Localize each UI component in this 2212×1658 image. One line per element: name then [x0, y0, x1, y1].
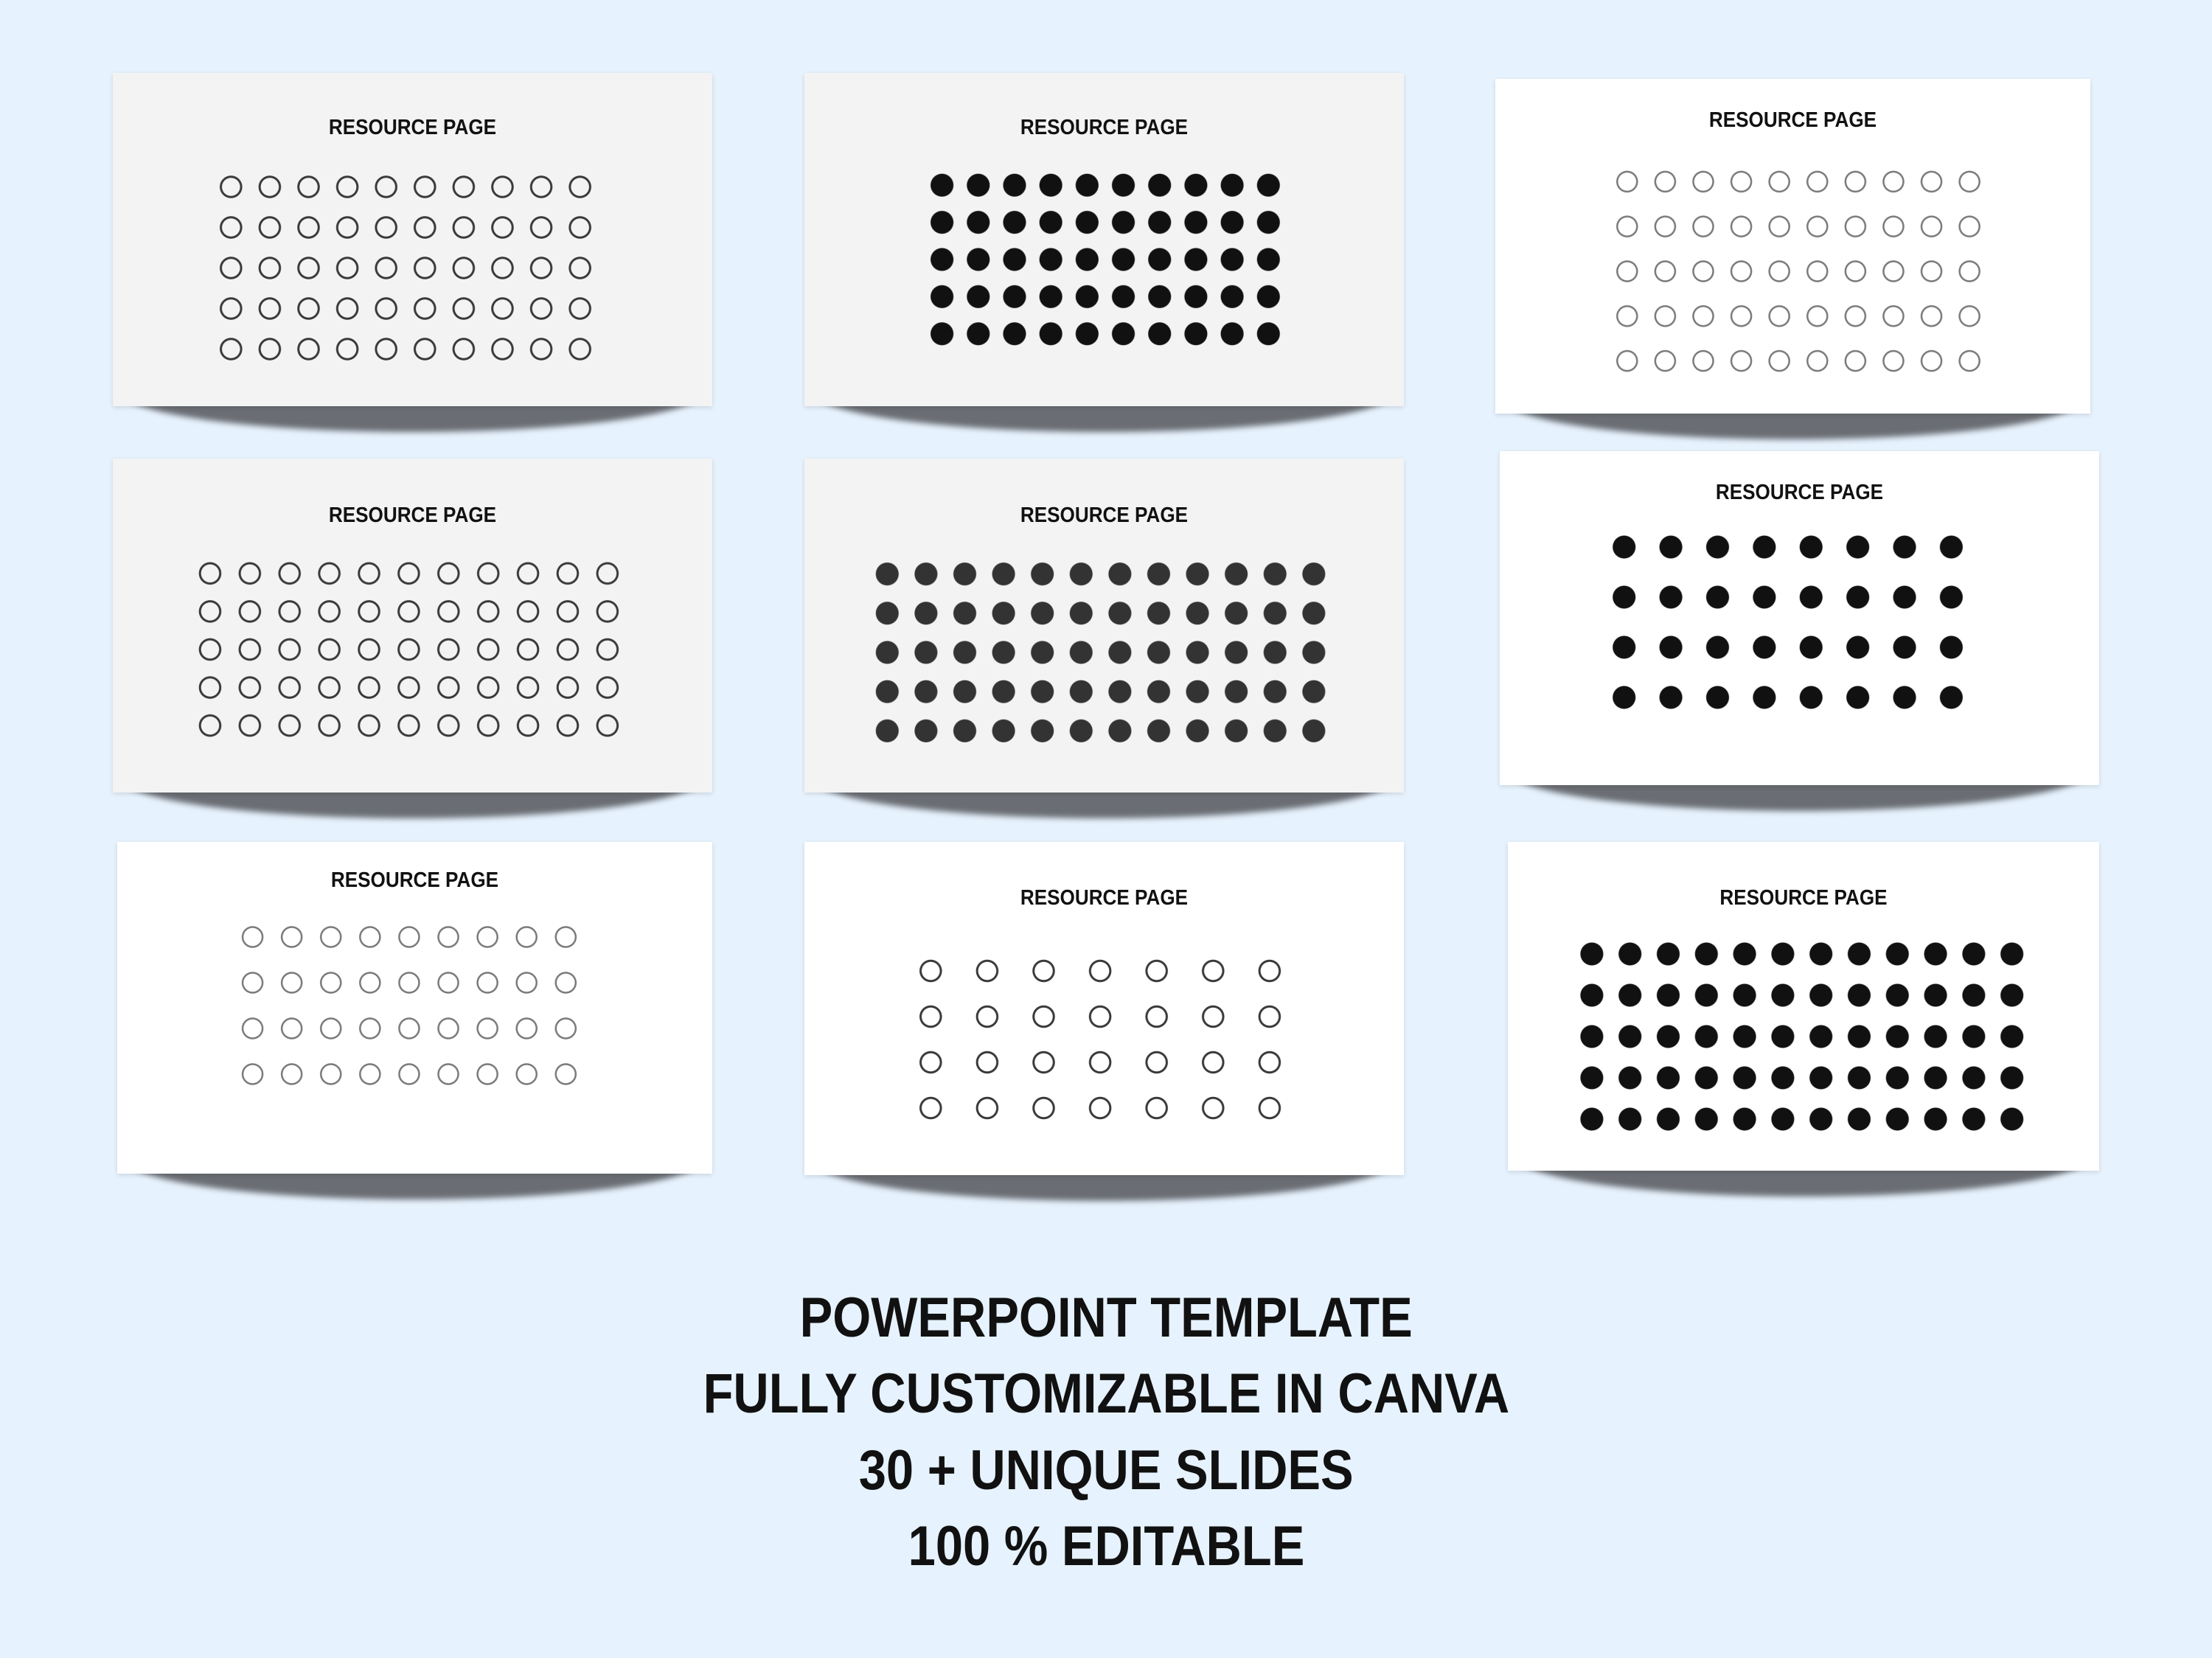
panel: slide 4 [113, 459, 712, 793]
heading: resource page 6: RESOURCE PAGE [1716, 481, 1883, 504]
heading: resource page 7: RESOURCE PAGE [331, 868, 498, 892]
icon grid 5 [868, 554, 1333, 750]
line 2: FULLY CUSTOMIZABLE IN CANVA [703, 1362, 1509, 1425]
panel: slide 7 [117, 842, 712, 1174]
icon grid 9 [1573, 933, 2031, 1140]
heading: resource page 1: RESOURCE PAGE [329, 116, 496, 139]
panel: slide 2 filled icons [804, 73, 1404, 406]
line 1: POWERPOINT TEMPLATE [799, 1286, 1413, 1349]
panel: slide 3 light icons [1495, 79, 2090, 414]
heading: resource page 2: RESOURCE PAGE [1020, 116, 1188, 139]
icon grid 4 [190, 554, 627, 745]
panel: slide 8 [804, 842, 1404, 1175]
icon grid 2 [924, 167, 1287, 352]
icon grid 7 [233, 914, 585, 1097]
panel: slide 5 [804, 459, 1404, 793]
line 4: 100 % EDITABLE [908, 1515, 1304, 1578]
panel: slide 9 [1508, 842, 2099, 1171]
line 3: 30 + UNIQUE SLIDES [859, 1439, 1353, 1502]
panel: slide 6 [1500, 451, 2099, 785]
heading: resource page 8: RESOURCE PAGE [1020, 886, 1188, 910]
icon grid 8 [902, 948, 1298, 1131]
icon grid 6 [1601, 522, 1975, 722]
heading: resource page 9: RESOURCE PAGE [1719, 886, 1888, 910]
heading: resource page 3: RESOURCE PAGE [1709, 108, 1877, 132]
icon grid 3 [1608, 159, 1989, 383]
heading: resource page 4: RESOURCE PAGE [329, 504, 496, 527]
panel: slide 1 outline icons [113, 73, 712, 406]
heading: resource page 5: RESOURCE PAGE [1020, 504, 1188, 527]
icon grid 1 [212, 167, 599, 369]
text block: product description [703, 1286, 1509, 1578]
